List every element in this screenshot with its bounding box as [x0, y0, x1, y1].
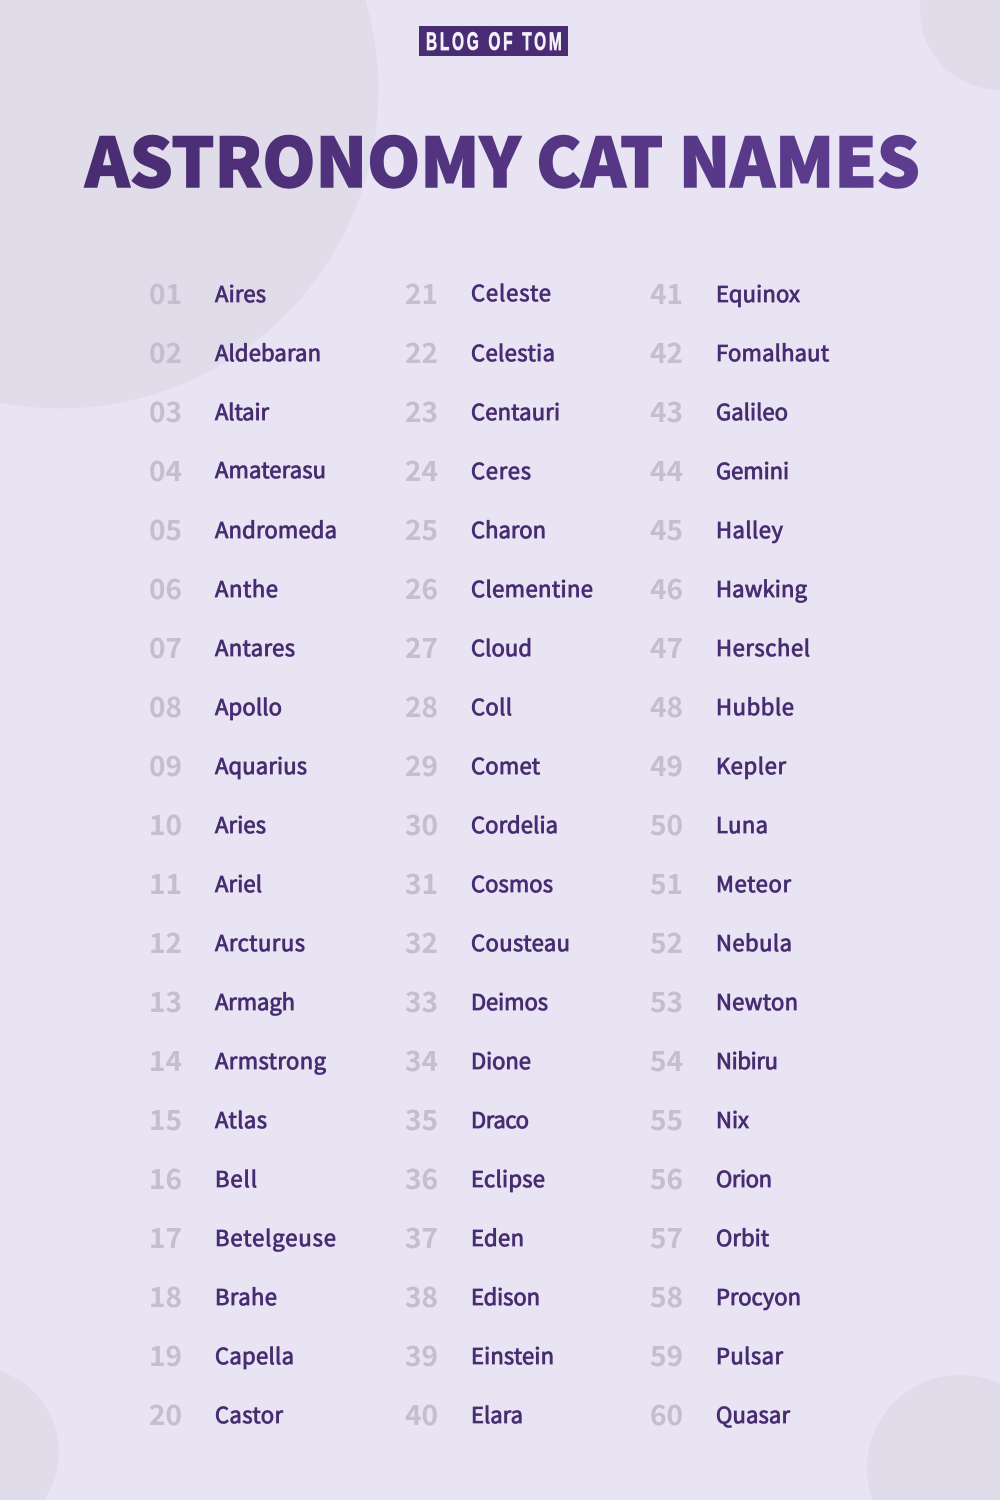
- row 03: 03: [149, 391, 182, 431]
- row 42: 42: [650, 332, 683, 372]
- decorative circle: bottom right: [867, 1375, 1000, 1500]
- row 27: 27: [405, 627, 438, 667]
- row 36: Eclipse: [471, 1162, 545, 1194]
- row 52: [650, 922, 792, 962]
- row 12: 12: [149, 922, 182, 962]
- row 10: 10: [149, 804, 182, 844]
- row 59: [650, 1335, 783, 1375]
- row 52: 52: [650, 922, 683, 962]
- row 40: [405, 1394, 523, 1434]
- row 18: 18: [149, 1276, 182, 1316]
- row 24: Ceres: [471, 454, 531, 486]
- row 58: [650, 1276, 801, 1316]
- row 34: [405, 1040, 531, 1080]
- row 25: [405, 509, 546, 549]
- row 11: Ariel: [215, 867, 262, 899]
- row 52: Nebula: [716, 926, 792, 958]
- row 20: 20: [149, 1394, 182, 1434]
- row 26: [405, 568, 593, 608]
- column 3: names 41 to 60: [650, 273, 829, 1434]
- row 44: [650, 450, 789, 490]
- row 06: 06: [149, 568, 182, 608]
- row 22: 22: [405, 332, 438, 372]
- row 43: Galileo: [716, 395, 788, 427]
- row 37: Eden: [471, 1221, 524, 1253]
- row 15: [149, 1099, 267, 1139]
- row 04: 04: [149, 450, 182, 490]
- row 39: 39: [405, 1335, 438, 1375]
- row 56: [650, 1158, 772, 1198]
- row 44: Gemini: [716, 454, 789, 486]
- row 19: 19: [149, 1335, 182, 1375]
- row 47: [650, 627, 810, 667]
- row 02: 02: [149, 332, 182, 372]
- row 50: [650, 804, 768, 844]
- row 56: Orion: [716, 1162, 772, 1194]
- row 45: 45: [650, 509, 683, 549]
- row 47: Herschel: [716, 631, 810, 663]
- row 60: 60: [650, 1394, 683, 1434]
- row 07: [149, 627, 295, 667]
- row 49: [650, 745, 786, 785]
- row 50: Luna: [716, 808, 768, 840]
- row 60: Quasar: [716, 1398, 790, 1430]
- row 58: 58: [650, 1276, 683, 1316]
- row 16: 16: [149, 1158, 182, 1198]
- row 47: 47: [650, 627, 683, 667]
- row 04: Amaterasu: [215, 453, 326, 485]
- row 56: 56: [650, 1158, 683, 1198]
- row 34: 34: [405, 1040, 438, 1080]
- row 07: 07: [149, 627, 182, 667]
- row 17: Betelgeuse: [215, 1221, 336, 1253]
- row 16: [149, 1158, 257, 1198]
- row 22: [405, 332, 555, 372]
- row 29: 29: [405, 745, 438, 785]
- row 22: Celestia: [471, 336, 555, 368]
- row 51: [650, 863, 791, 903]
- row 41: Equinox: [716, 277, 800, 309]
- row 03: Altair: [215, 395, 269, 427]
- row 49: Kepler: [716, 749, 786, 781]
- row 58: Procyon: [716, 1280, 801, 1312]
- row 48: Hubble: [716, 690, 794, 722]
- row 23: Centauri: [471, 395, 560, 427]
- row 19: [149, 1335, 294, 1375]
- row 38: Edison: [471, 1280, 540, 1312]
- decorative circle: top left: [0, 0, 378, 408]
- row 08: 08: [149, 686, 182, 726]
- row 36: [405, 1158, 545, 1198]
- row 13: 13: [149, 981, 182, 1021]
- row 29: [405, 745, 540, 785]
- row 01: 01: [149, 273, 182, 313]
- row 42: [650, 332, 829, 372]
- row 06: Anthe: [215, 572, 278, 604]
- row 14: Armstrong: [215, 1044, 327, 1076]
- row 51: Meteor: [716, 867, 791, 899]
- row 45: Halley: [716, 513, 784, 545]
- row 39: Einstein: [471, 1339, 554, 1371]
- row 03: [149, 391, 269, 431]
- row 55: Nix: [716, 1103, 749, 1135]
- row 40: 40: [405, 1394, 438, 1434]
- row 23: 23: [405, 391, 438, 431]
- row 38: [405, 1276, 540, 1316]
- row 26: Clementine: [471, 572, 593, 604]
- row 46: 46: [650, 568, 683, 608]
- row 15: 15: [149, 1099, 182, 1139]
- row 04: [149, 450, 326, 490]
- row 15: Atlas: [215, 1103, 267, 1135]
- row 51: 51: [650, 863, 683, 903]
- row 30: 30: [405, 804, 438, 844]
- row 05: [149, 509, 337, 549]
- row 28: 28: [405, 686, 438, 726]
- row 24: [405, 450, 531, 490]
- row 35: Draco: [471, 1103, 529, 1135]
- row 26: 26: [405, 568, 438, 608]
- row 33: [405, 981, 548, 1021]
- row 60: [650, 1394, 790, 1434]
- row 16: Bell: [215, 1162, 257, 1194]
- row 31: 31: [405, 863, 438, 903]
- row 18: Brahe: [215, 1280, 277, 1312]
- row 48: 48: [650, 686, 683, 726]
- row 19: Capella: [215, 1339, 294, 1371]
- row 30: [405, 804, 558, 844]
- row 59: Pulsar: [716, 1339, 783, 1371]
- row 13: [149, 981, 295, 1021]
- row 55: 55: [650, 1099, 683, 1139]
- row 37: [405, 1217, 524, 1257]
- row 10: Aries: [215, 808, 266, 840]
- row 01: [149, 273, 266, 313]
- row 28: [405, 686, 512, 726]
- row 21: Celeste: [471, 276, 551, 308]
- row 13: Armagh: [215, 985, 295, 1017]
- row 09: 09: [149, 745, 182, 785]
- row 57: Orbit: [716, 1221, 769, 1253]
- row 55: [650, 1099, 749, 1139]
- row 24: 24: [405, 450, 438, 490]
- row 39: [405, 1335, 554, 1375]
- row 50: 50: [650, 804, 683, 844]
- decorative circle: top right: [920, 0, 1000, 90]
- row 30: Cordelia: [471, 808, 558, 840]
- row 08: [149, 686, 282, 726]
- row 40: Elara: [471, 1398, 523, 1430]
- row 44: 44: [650, 450, 683, 490]
- row 53: 53: [650, 981, 683, 1021]
- row 21: 21: [405, 273, 438, 313]
- row 09: [149, 745, 307, 785]
- row 43: 43: [650, 391, 683, 431]
- row 05: Andromeda: [215, 513, 337, 545]
- row 53: Newton: [716, 985, 798, 1017]
- row 42: Fomalhaut: [716, 336, 829, 368]
- row 10: [149, 804, 266, 844]
- row 36: 36: [405, 1158, 438, 1198]
- row 41: 41: [650, 273, 683, 313]
- column 2: names 21 to 40: [405, 273, 593, 1434]
- row 32: Cousteau: [471, 926, 570, 958]
- row 06: [149, 568, 278, 608]
- row 43: [650, 391, 788, 431]
- row 48: [650, 686, 794, 726]
- row 34: Dione: [471, 1044, 531, 1076]
- row 33: Deimos: [471, 985, 548, 1017]
- row 27: Cloud: [471, 631, 532, 663]
- row 07: Antares: [215, 631, 295, 663]
- row 17: [149, 1217, 336, 1257]
- row 32: 32: [405, 922, 438, 962]
- row 28: Coll: [471, 690, 512, 722]
- row 20: [149, 1394, 283, 1434]
- row 35: 35: [405, 1099, 438, 1139]
- row 54: Nibiru: [716, 1044, 778, 1076]
- row 01: Aires: [215, 277, 266, 309]
- row 12: Arcturus: [215, 926, 305, 958]
- row 29: Comet: [471, 749, 540, 781]
- row 25: Charon: [471, 513, 546, 545]
- row 21: [405, 273, 551, 313]
- row 37: 37: [405, 1217, 438, 1257]
- row 49: 49: [650, 745, 683, 785]
- row 31: Cosmos: [471, 867, 553, 899]
- row 53: [650, 981, 798, 1021]
- row 41: [650, 273, 800, 313]
- row 25: 25: [405, 509, 438, 549]
- row 46: [650, 568, 808, 608]
- row 14: [149, 1040, 327, 1080]
- row 38: 38: [405, 1276, 438, 1316]
- row 08: Apollo: [215, 690, 282, 722]
- row 18: [149, 1276, 277, 1316]
- row 32: [405, 922, 570, 962]
- row 35: [405, 1099, 529, 1139]
- row 57: 57: [650, 1217, 683, 1257]
- row 11: 11: [149, 863, 182, 903]
- row 02: Aldebaran: [215, 336, 321, 368]
- row 02: [149, 332, 321, 372]
- row 09: Aquarius: [215, 749, 307, 781]
- row 17: 17: [149, 1217, 182, 1257]
- row 59: 59: [650, 1335, 683, 1375]
- row 05: 05: [149, 509, 182, 549]
- logo: Blog of Tom: BLOG OF TOM: [426, 28, 562, 56]
- row 45: [650, 509, 784, 549]
- row 31: [405, 863, 553, 903]
- row 14: 14: [149, 1040, 182, 1080]
- row 27: [405, 627, 532, 667]
- row 54: [650, 1040, 778, 1080]
- row 33: 33: [405, 981, 438, 1021]
- column 1: names 01 to 20: [149, 273, 337, 1434]
- title: ASTRONOMY CAT NAMES: [84, 108, 920, 207]
- row 54: 54: [650, 1040, 683, 1080]
- row 23: [405, 391, 560, 431]
- decorative circle: bottom left: [0, 1367, 59, 1500]
- row 20: Castor: [215, 1398, 283, 1430]
- row 57: [650, 1217, 769, 1257]
- row 46: Hawking: [716, 572, 808, 604]
- row 11: [149, 863, 262, 903]
- row 12: [149, 922, 305, 962]
